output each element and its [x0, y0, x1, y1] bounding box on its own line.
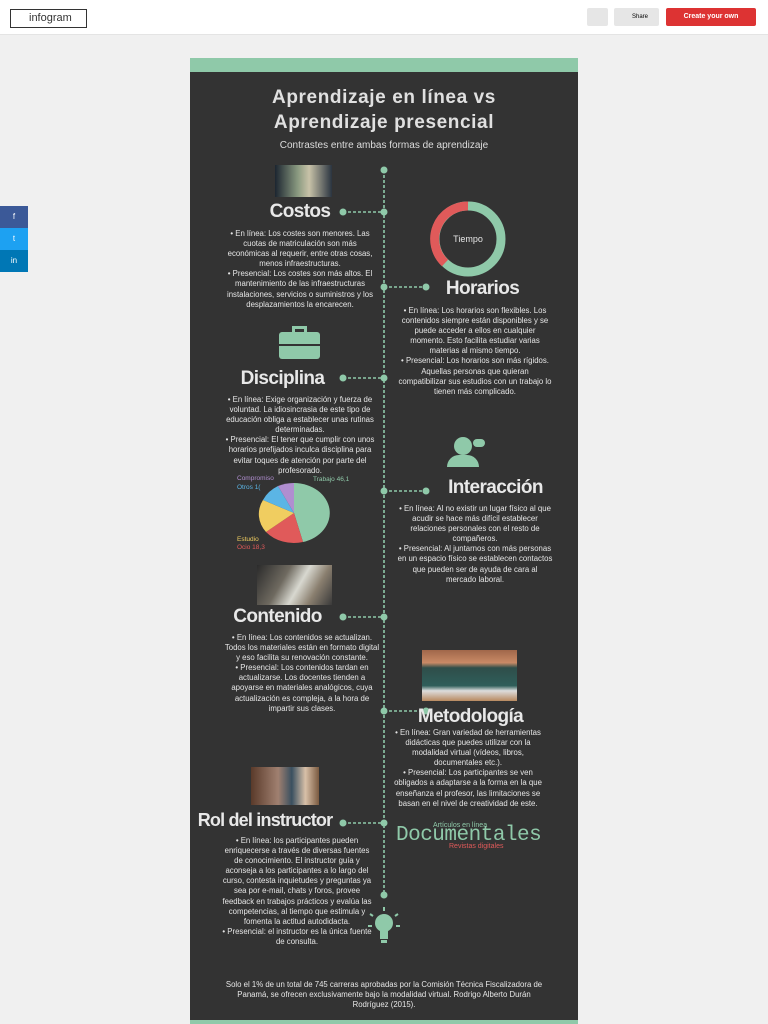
- timeline: [340, 166, 430, 898]
- social buttons: f: [13, 212, 15, 221]
- text: rol del instructor: • Presencial: el instructor es la única fuente de consulta.: [222, 927, 372, 946]
- text: disciplina: [226, 395, 374, 475]
- title: Aprendizaje presencial: [274, 112, 494, 133]
- title: [272, 87, 496, 133]
- text: horarios: • En línea: Los horarios son flexibles. Los contenidos siempre están disponibles y se puede acceder a ellos en cualquier momento. Esto facilita estudiar varias materias al mismo tiempo.: [402, 306, 548, 355]
- pie chart: Ocio 18,3: [237, 544, 265, 551]
- text: metodología: • Presencial: Los participantes se ven obligados a adaptarse a la forma en la que enseñanza el profesor, las limitaciones se basan en el nivel de creatividad de este.: [394, 768, 542, 808]
- heading: Interacción: Interacción: [448, 477, 543, 498]
- text: interacción: • Presencial: Al juntarnos con más personas en un espacio físico se establecen contactos que pueden ser de ayuda de cara al mercado laboral.: [398, 544, 552, 584]
- text: costos: [227, 229, 373, 309]
- text: horarios: [398, 306, 552, 396]
- heading: Rol del instructor: Rol del instructor: [198, 810, 332, 830]
- text: metodología: [394, 728, 542, 808]
- text: contenido: • Presencial: Los contenidos tardan en actualizarse. Los docentes tienden a apoyarse en materiales analógicos, cuya actualización es compleja, a la hora de impartir sus clases.: [231, 663, 373, 713]
- logo: infogram: [29, 12, 72, 24]
- heading: Horarios: Horarios: [446, 278, 519, 299]
- pie chart: Estudio: [237, 536, 259, 543]
- pie chart: Trabajo 46,1: [313, 476, 350, 483]
- social buttons: t: [13, 234, 15, 243]
- logo: [10, 9, 87, 28]
- text: horarios: • Presencial: Los horarios son más rígidos. Aquellas personas que quieran compatibilizar sus estudios con un trabajo lo tienen más complicado.: [398, 356, 552, 396]
- text: interacción: [398, 504, 552, 584]
- text: interacción: • En línea: Al no existir un lugar físico al que acudir se hace más difícil establecer relaciones personales con el resto de compañeros.: [399, 504, 551, 543]
- subtitle: Contrastes entre ambas formas de aprendizaje: [280, 140, 488, 151]
- social buttons: [0, 206, 28, 272]
- word cloud: Artículos en línea: [433, 822, 487, 829]
- word cloud: Documentales: [396, 824, 541, 847]
- heading: Disciplina: Disciplina: [241, 368, 324, 389]
- pie chart: Compromiso: [237, 475, 274, 482]
- photo: chalkboard: [422, 650, 517, 701]
- buttons: [587, 8, 608, 26]
- text: costos: • Presencial: Los costes son más altos. El mantenimiento de las infraestructuras instalaciones, servicios o suministros y los desplazamientos la encarecen.: [227, 269, 373, 309]
- donut chart: Tiempo: [430, 202, 506, 276]
- donut chart: Tiempo: Tiempo: [453, 234, 483, 244]
- photo: desk map: [257, 565, 332, 605]
- text: metodología: • En línea: Gran variedad de herramientas didácticas que puedes utilizar con la modalidad virtual (vídeos, libros, documentales etc.).: [395, 728, 541, 767]
- icon: lightbulb: [368, 907, 400, 943]
- photo: instructor: [251, 767, 319, 805]
- heading: Costos: Costos: [270, 201, 330, 222]
- photo: money: [275, 165, 332, 197]
- text: rol del instructor: • En línea: los participantes pueden enriquecerse a través de diversas fuentes de conocimiento. El instructor guía y aconseja a los participantes a lo largo del curso, contesta inquietudes y preguntas ya sea por e-mail, chats y foros, provee feedback en trabajos prácticos y evalúa las competencias, al tiempo que estimula y fomenta la actitud autodidacta.: [222, 836, 372, 926]
- footer note: Solo el 1% de un total de 745 carreras aprobadas por la Comisión Técnica Fiscalizadora de Panamá, se ofrecen exclusivamente bajo la modalidad virtual. Rodrigo Alberto Durán Rodríguez (2015).: [226, 980, 542, 1009]
- social buttons: in: [11, 256, 17, 265]
- icon: headset person: [447, 437, 485, 467]
- word cloud: Revistas digitales: [449, 843, 503, 850]
- title: Aprendizaje en línea vs: [272, 87, 496, 108]
- pie chart: [237, 475, 350, 551]
- text: costos: • En línea: Los costes son menores. Las cuotas de matriculación son más económicas al requerir, entre otras cosas, menos infraestructuras.: [228, 229, 372, 268]
- panel: [190, 58, 578, 1024]
- heading: Metodología: Metodología: [418, 706, 523, 727]
- header bar: Create your own: [684, 13, 738, 20]
- icon: briefcase: [279, 326, 320, 359]
- header bar: [0, 0, 768, 35]
- pie chart: Otros 1(: [237, 484, 261, 491]
- header bar: Share: [632, 14, 648, 20]
- text: disciplina: • En línea: Exige organización y fuerza de voluntad. La idiosincrasia de este tipo de educación obliga a establecer unas rutinas determinadas.: [226, 395, 374, 434]
- text: contenido: [225, 633, 379, 713]
- text: disciplina: • Presencial: El tener que cumplir con unos horarios prefijados inculca disciplina para evitar toques de atención por parte del profesorado.: [226, 435, 374, 475]
- heading: Contenido: Contenido: [233, 606, 322, 627]
- text: contenido: • En línea: Los contenidos se actualizan. Todos los materiales están en formato digital y eso facilita su renovación constante.: [225, 633, 379, 662]
